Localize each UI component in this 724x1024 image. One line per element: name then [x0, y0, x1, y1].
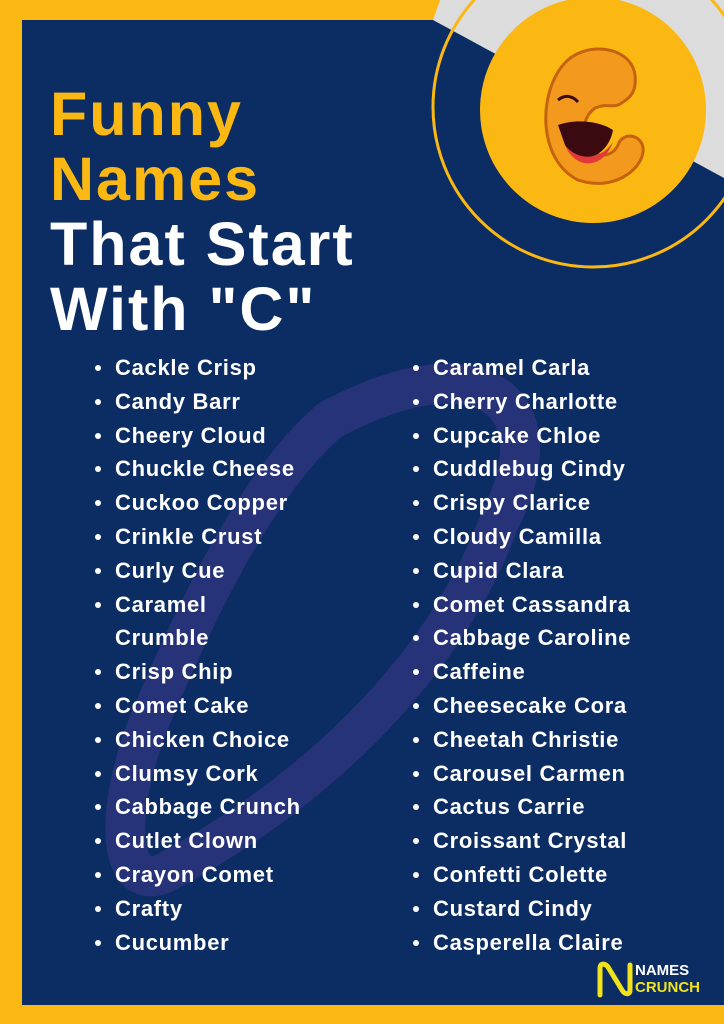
list: right column: Carousel Carmen [433, 761, 626, 786]
list: left column: Cheery Cloud [115, 423, 266, 448]
list: right column: Caramel Carla [433, 355, 590, 380]
list: right column: Crispy Clarice [433, 490, 591, 515]
icon: laughing C emoji [544, 48, 645, 185]
list: left column: Clumsy Cork [115, 761, 258, 786]
list: right column: Cloudy Camilla [433, 524, 602, 549]
list: right column: Cheetah Christie [433, 727, 619, 752]
list: left column: Comet Cake [115, 693, 249, 718]
title [50, 80, 355, 343]
list: right column: Caffeine [433, 659, 525, 684]
list: left column: Chicken Choice [115, 727, 290, 752]
list: right column: Cuddlebug Cindy [433, 456, 626, 481]
title: That Start [50, 210, 355, 278]
list: left column [95, 355, 301, 955]
list: left column: Crayon Comet [115, 862, 274, 887]
list: left column: Cabbage Crunch [115, 794, 301, 819]
list: right column: Cupid Clara [433, 558, 564, 583]
list: right column: Cheesecake Cora [433, 693, 627, 718]
list: right column: Casperella Claire [433, 930, 623, 955]
list: left column: Crumble [115, 625, 209, 650]
list: left column: Crafty [115, 896, 183, 921]
list: left column: Cackle Crisp [115, 355, 257, 380]
title: With "C" [50, 275, 316, 343]
list: left column: Cucumber [115, 930, 229, 955]
list: right column: Cupcake Chloe [433, 423, 601, 448]
list: right column [413, 355, 631, 955]
logo: Names Crunch [598, 962, 700, 998]
list: right column: Cactus Carrie [433, 794, 585, 819]
list: left column: Caramel [115, 592, 207, 617]
list: left column: Crinkle Crust [115, 524, 262, 549]
list: left column: Candy Barr [115, 389, 241, 414]
list: right column: Confetti Colette [433, 862, 608, 887]
list: left column: Chuckle Cheese [115, 456, 295, 481]
title: Names [50, 145, 260, 213]
list: right column: Cabbage Caroline [433, 625, 631, 650]
list: right column: Croissant Crystal [433, 828, 627, 853]
list: right column: Comet Cassandra [433, 592, 631, 617]
list: right column: Custard Cindy [433, 896, 592, 921]
title: Funny [50, 80, 243, 148]
list: left column: Curly Cue [115, 558, 225, 583]
list: left column: Cutlet Clown [115, 828, 258, 853]
logo: Names Crunch: CRUNCH [635, 979, 700, 996]
list: right column: Cherry Charlotte [433, 389, 618, 414]
list: left column: Cuckoo Copper [115, 490, 288, 515]
logo: Names Crunch: NAMES [635, 962, 689, 979]
list: left column: Crisp Chip [115, 659, 233, 684]
